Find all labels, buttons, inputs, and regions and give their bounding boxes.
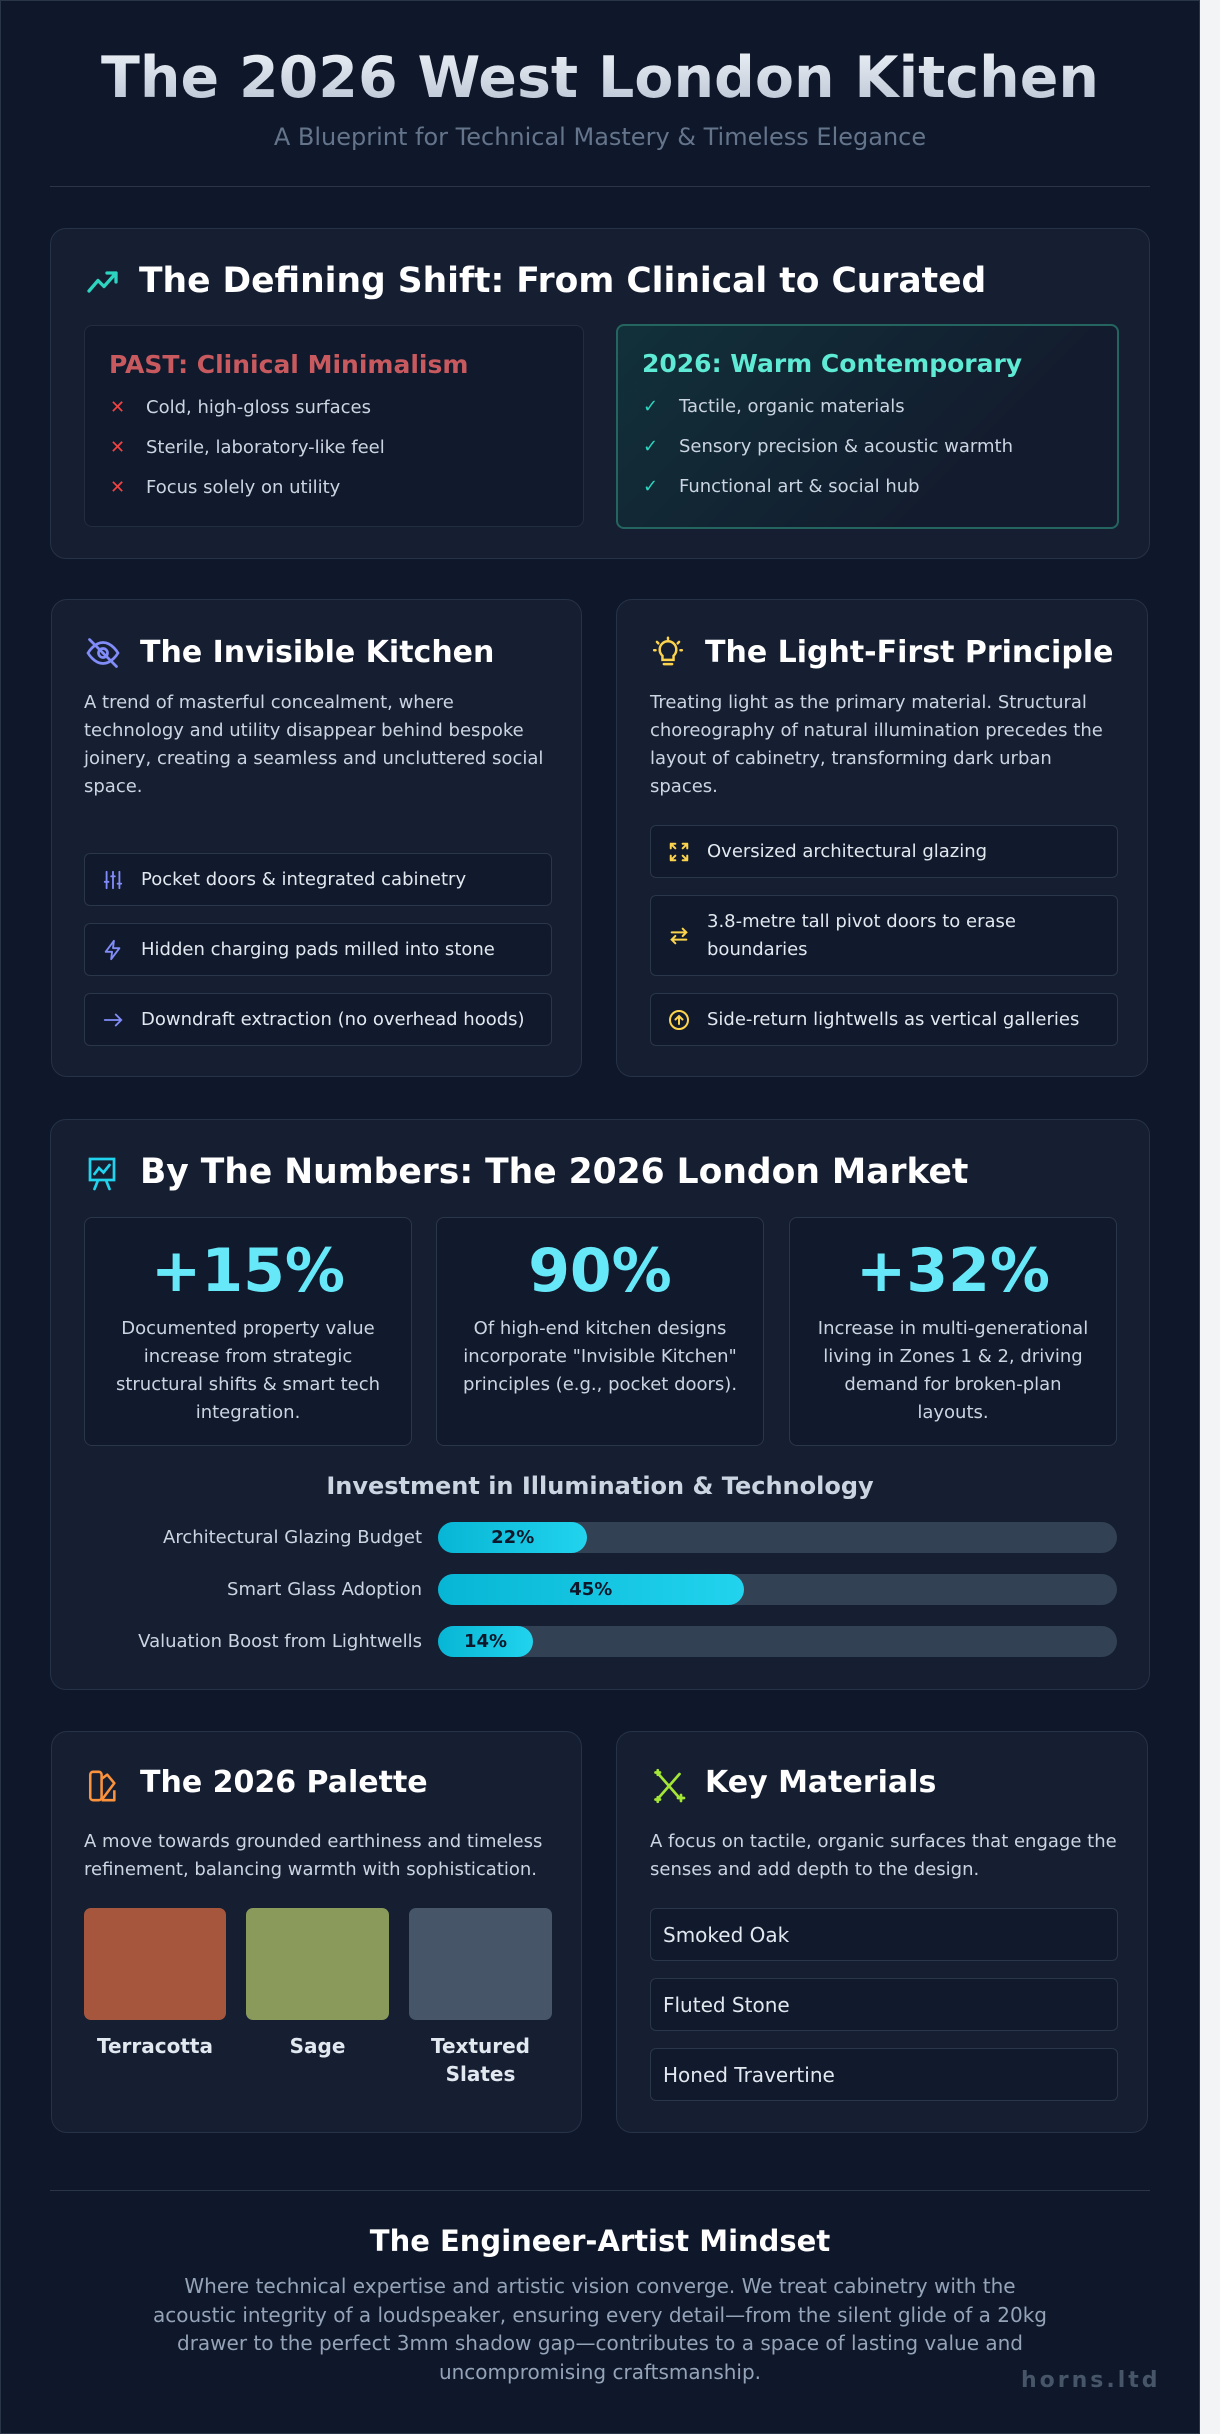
material	[650, 1908, 1118, 1961]
icon: sparkle tools	[654, 1768, 686, 1804]
heading: The 2026 Palette	[140, 1765, 428, 1800]
panel: invisible kitchen	[51, 599, 582, 1077]
heading: The Light-First Principle	[705, 635, 1113, 670]
card: past: ✕	[110, 437, 125, 458]
card: 2026: Tactile, organic materials	[679, 396, 905, 417]
panel: defining shift	[50, 228, 1150, 559]
icon: trend arrow	[87, 271, 118, 293]
card: past: PAST: Clinical Minimalism	[109, 350, 468, 379]
card: past: Cold, high-gloss surfaces	[146, 397, 371, 418]
icon: eye off	[86, 638, 120, 668]
list item	[650, 895, 1118, 976]
card: past: Sterile, laboratory-like feel	[146, 437, 385, 458]
card: past: ✕	[110, 477, 125, 498]
swatch: terracotta: Terracotta	[97, 2034, 213, 2058]
stat: 15%: +15%	[151, 1236, 345, 1306]
bar chart	[138, 1522, 1117, 1657]
subtitle: A Blueprint for Technical Mastery & Timeless Elegance	[274, 123, 926, 151]
card: 2026: ✓	[643, 436, 658, 457]
footer text: Where technical expertise and artistic vision converge. We treat cabinetry with the acoustic integrity of a loudspeaker, ensuring every detail—from the silent glide of a 20kg drawer to the perfect 3mm shadow gap—contributes to a space of lasting value and uncompromising craftsmanship.	[153, 2274, 1047, 2384]
stat: 15%: Documented property value increase from strategic structural shifts & smart tech integration.	[116, 1318, 380, 1423]
list item: Pocket doors & integrated cabinetry	[141, 869, 466, 890]
footer heading: The Engineer-Artist Mindset	[370, 2224, 830, 2258]
stat: 32%	[789, 1217, 1117, 1446]
bar chart: Smart Glass Adoption	[227, 1579, 422, 1600]
panel: by the numbers	[50, 1119, 1150, 1690]
card: 2026: 2026: Warm Contemporary	[642, 349, 1022, 378]
heading: The Defining Shift: From Clinical to Curated	[139, 261, 986, 301]
panel: palette	[51, 1731, 582, 2133]
card: 2026: ✓	[643, 476, 658, 497]
bar chart: 14%	[464, 1631, 507, 1652]
heading: By The Numbers: The 2026 London Market	[140, 1152, 968, 1192]
text: A move towards grounded earthiness and timeless refinement, balancing warmth with sophistication.	[84, 1831, 542, 1880]
card: 2026: Sensory precision & acoustic warmth	[679, 436, 1013, 457]
list item	[84, 923, 552, 976]
swatch: sage: Sage	[290, 2034, 345, 2058]
panel: key materials	[616, 1731, 1148, 2133]
list item	[650, 993, 1118, 1046]
card: past: Focus solely on utility	[146, 477, 340, 498]
stat: 32%: +32%	[856, 1236, 1050, 1306]
bar chart: 45%	[569, 1579, 612, 1600]
stat: 90%	[436, 1217, 764, 1446]
bar chart: Valuation Boost from Lightwells	[138, 1631, 422, 1652]
material: Honed Travertine	[663, 2062, 835, 2086]
list item	[84, 853, 552, 906]
swatch: slates	[409, 1908, 552, 2086]
swatch: terracotta	[84, 1908, 226, 2058]
card: past: ✕	[110, 397, 125, 418]
card: 2026: ✓	[643, 396, 658, 417]
text: A focus on tactile, organic surfaces that engage the senses and add depth to the design.	[650, 1831, 1117, 1880]
list item: Hidden charging pads milled into stone	[141, 939, 495, 960]
heading: Key Materials	[705, 1765, 936, 1800]
material: Smoked Oak	[663, 1922, 789, 1946]
text: A trend of masterful concealment, where technology and utility disappear behind bespoke joinery, creating a seamless and uncluttered social space.	[84, 692, 543, 797]
icon: bulb	[652, 636, 684, 666]
swatch: slates: Slates	[446, 2062, 515, 2086]
bar chart: 22%	[491, 1527, 534, 1548]
panel: light first	[616, 599, 1148, 1077]
swatch: sage	[246, 1908, 389, 2058]
stat: 90%: 90%	[528, 1236, 672, 1306]
title: The 2026 West London Kitchen	[101, 45, 1099, 111]
icon: swatch	[88, 1770, 116, 1802]
bar chart: Architectural Glazing Budget	[163, 1527, 422, 1548]
heading: The Invisible Kitchen	[140, 635, 494, 670]
list item: boundaries	[707, 938, 808, 960]
stat: 90%: Of high-end kitchen designs incorporate "Invisible Kitchen" principles (e.g., pocket doors).	[463, 1318, 737, 1395]
list item	[650, 825, 1118, 878]
material: Fluted Stone	[663, 1992, 790, 2016]
stat: 32%: Increase in multi-generational living in Zones 1 & 2, driving demand for broken-plan layouts.	[818, 1318, 1088, 1423]
material	[650, 2048, 1118, 2101]
list item: Side-return lightwells as vertical galleries	[707, 1009, 1079, 1030]
swatch: slates: Textured	[431, 2034, 530, 2058]
card: 2026	[616, 324, 1119, 529]
list item	[84, 993, 552, 1046]
card: past	[84, 325, 584, 527]
card: 2026: Functional art & social hub	[679, 476, 920, 497]
list item: 3.8-metre tall pivot doors to erase	[707, 910, 1016, 932]
list item: Oversized architectural glazing	[707, 841, 987, 862]
material	[650, 1978, 1118, 2031]
watermark: horns.ltd	[1021, 2368, 1161, 2393]
icon: chart board	[88, 1158, 116, 1190]
chart title: Investment in Illumination & Technology	[326, 1472, 874, 1500]
list item: Downdraft extraction (no overhead hoods)	[141, 1009, 525, 1030]
text: Treating light as the primary material. Structural choreography of natural illumination precedes the layout of cabinetry, transforming dark urban spaces.	[650, 692, 1103, 797]
stat: 15%	[84, 1217, 412, 1446]
